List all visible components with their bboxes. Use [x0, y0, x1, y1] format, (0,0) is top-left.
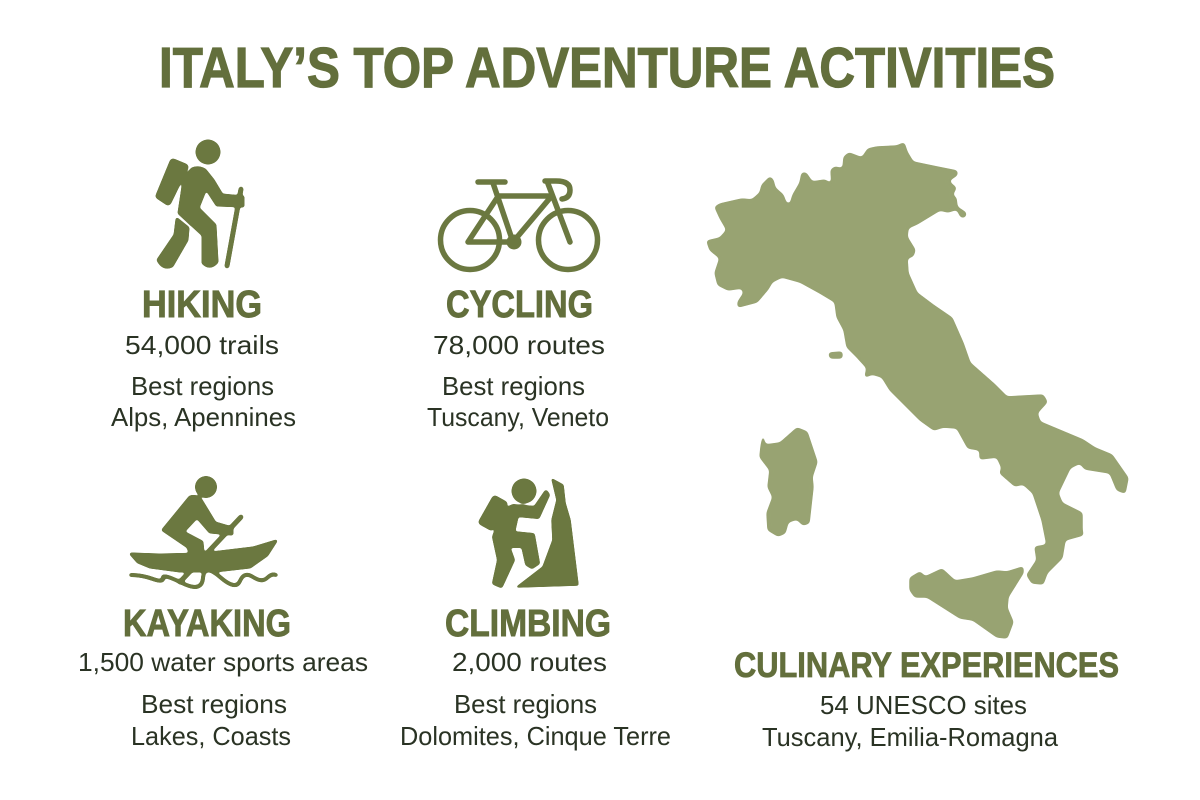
map: Sardinia	[760, 428, 817, 536]
heading: kayaking: KAYAKING	[123, 603, 291, 645]
title: ITALY’S TOP ADVENTURE ACTIVITIES	[159, 36, 1055, 100]
map: mainland	[707, 143, 1128, 584]
icon: climber	[482, 478, 578, 587]
map: Sicily	[910, 567, 1023, 638]
heading: climbing: CLIMBING	[445, 603, 611, 645]
text: regions: Tuscany, Emilia-Romagna	[762, 722, 1059, 752]
text: best regions: Best regions	[131, 371, 274, 401]
text: best regions: Dolomites, Cinque Terre	[400, 721, 671, 751]
map of Italy	[707, 143, 1128, 638]
stat: water sports areas: 1,500 water sports areas	[78, 647, 368, 677]
icon: kayak	[131, 476, 276, 587]
text: best regions	[111, 371, 296, 432]
stat: UNESCO sites: 54 UNESCO sites	[820, 690, 1027, 720]
heading: hiking: HIKING	[142, 284, 262, 326]
panel: hiking	[111, 140, 296, 432]
heading: culinary experiences: CULINARY EXPERIENCES	[734, 646, 1119, 685]
text: best regions: Lakes, Coasts	[131, 721, 291, 751]
text: best regions: Best regions	[442, 371, 585, 401]
text: best regions: Best regions	[454, 689, 597, 719]
panel: kayaking	[78, 476, 368, 751]
stat: routes: 2,000 routes	[452, 647, 607, 677]
icon: bicycle	[440, 181, 598, 270]
text: best regions	[131, 689, 291, 751]
stat: routes: 78,000 routes	[433, 330, 605, 360]
map: Elba	[829, 352, 842, 358]
heading: cycling: CYCLING	[446, 284, 593, 326]
panel: culinary experiences	[734, 646, 1119, 752]
text: best regions: Alps, Apennines	[111, 402, 296, 432]
icon: hiker	[158, 140, 243, 267]
text: best regions	[427, 371, 609, 432]
text: best regions: Tuscany, Veneto	[427, 402, 609, 432]
stat: trails: 54,000 trails	[125, 330, 279, 360]
text: best regions: Best regions	[141, 689, 287, 719]
text: best regions	[400, 689, 671, 751]
panel: cycling	[427, 181, 609, 432]
panel: climbing	[400, 478, 671, 751]
